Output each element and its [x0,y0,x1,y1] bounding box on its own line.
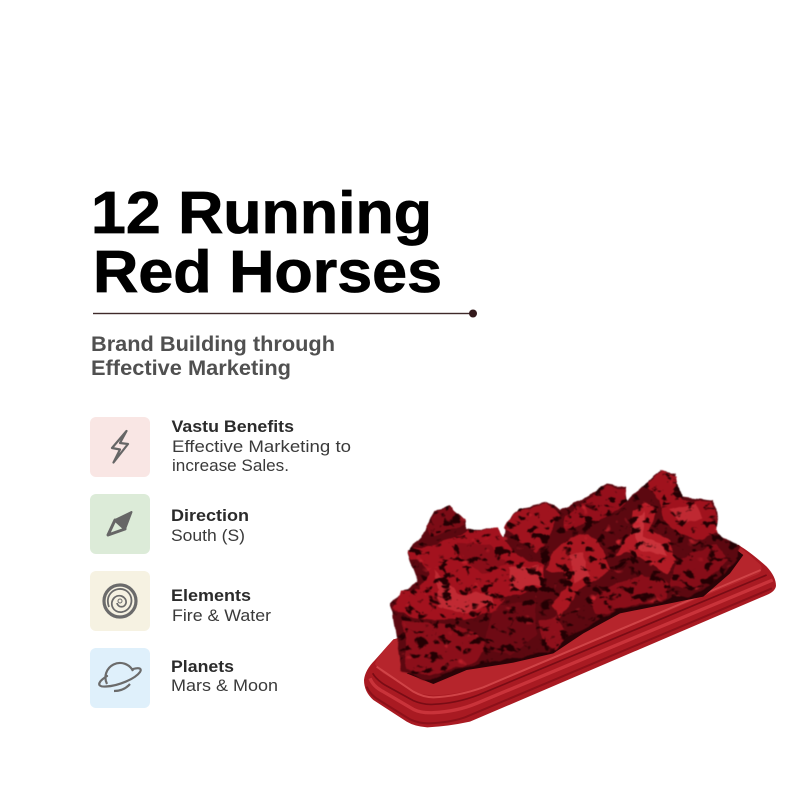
text: elements: Elements [171,587,251,605]
product: red horse figurine [364,467,776,727]
text: vastu benefits [172,418,351,475]
subtitle [91,333,335,380]
text: vastu benefits: Vastu Benefits [172,418,294,436]
shadow under horses [407,550,743,684]
dark creases texture [387,467,743,687]
panel: planets [90,648,278,708]
text: vastu benefits: Effective Marketing to [172,438,351,456]
text: planets [171,658,278,695]
icon: spiral [90,571,150,631]
title: Red Horses [93,239,442,305]
panel: vastu benefits [90,417,351,477]
text: vastu benefits: increase Sales. [172,457,289,475]
subtitle: Effective Marketing [91,357,291,380]
text: elements: Fire & Water [172,607,272,625]
horses mass [387,467,743,687]
figurine base [364,545,776,727]
text: planets: Mars & Moon [171,677,278,695]
rearing horse [613,502,675,573]
text: direction: Direction [171,507,249,525]
text: planets: Planets [171,658,234,676]
text: direction [171,507,249,545]
back horse heads [425,508,465,537]
title: 12 Running [91,180,432,246]
icon: lightning bolt [90,417,150,477]
icon: ringed planet [90,648,150,708]
text: elements [171,587,272,625]
middle horse [547,533,610,617]
divider line with end dot [93,310,477,318]
panel: elements [90,571,272,631]
icon: compass needle [90,494,150,554]
panel: direction [90,494,249,554]
lower foliage [403,620,490,677]
front horse [393,528,545,620]
subtitle: Brand Building through [91,333,335,356]
text: direction: South (S) [171,527,245,545]
right back horse [645,470,718,540]
title [91,180,442,305]
